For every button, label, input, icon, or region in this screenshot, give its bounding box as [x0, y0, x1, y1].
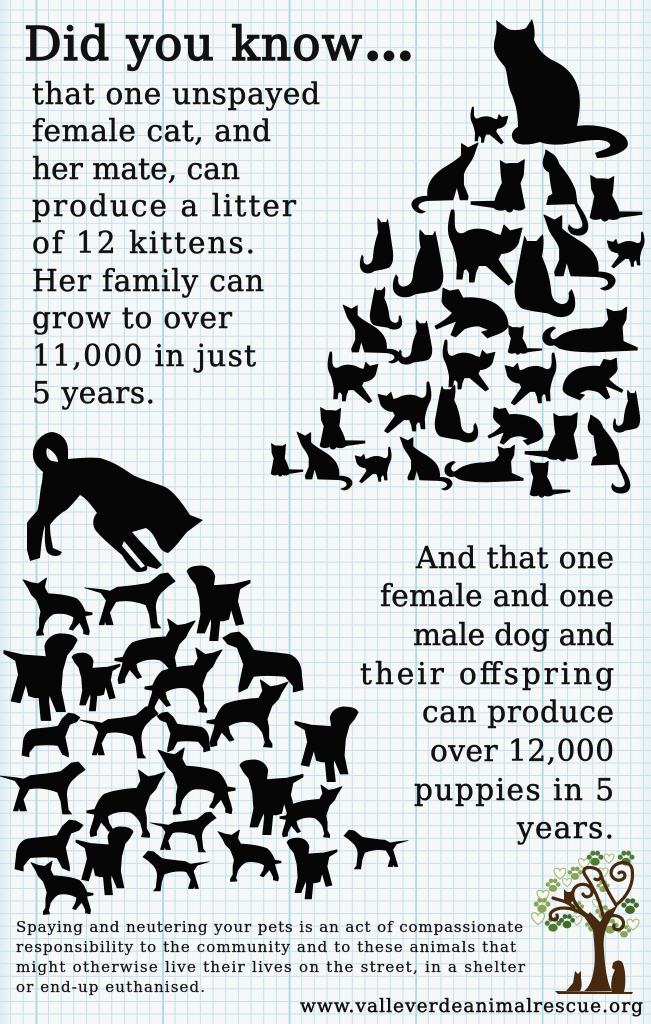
cat walking — [328, 352, 378, 403]
dog pointy ears — [207, 680, 288, 747]
dog pointy ears — [145, 648, 222, 712]
text block: dog fact: And that one — [415, 541, 614, 575]
dog slim — [150, 812, 216, 852]
dog pointy ears — [87, 770, 165, 837]
kitten — [320, 407, 365, 449]
small cat — [566, 971, 582, 991]
cat long tail — [543, 150, 588, 235]
owl on branch — [564, 889, 573, 903]
cat crouching — [488, 407, 543, 445]
dog lab — [295, 707, 358, 781]
dog pointy ears — [23, 578, 92, 635]
title: ... — [364, 13, 414, 72]
text block: dog fact: over 12,000 — [430, 734, 614, 768]
cat from behind — [393, 230, 443, 297]
kitten — [508, 325, 542, 354]
dog pyramid — [0, 432, 408, 914]
kitten — [471, 160, 525, 212]
text block: spay and neuter message: responsibility to the community and to these animals that — [16, 938, 516, 956]
small dog — [611, 960, 625, 992]
text block: dog fact: years. — [516, 811, 614, 845]
cat from behind — [613, 390, 640, 432]
text block: cat fact — [32, 77, 320, 410]
dog pointy ears — [115, 619, 195, 684]
dog lab — [287, 838, 337, 899]
green paw leaves and hearts — [532, 851, 639, 938]
ground — [555, 991, 633, 994]
text block: cat fact: Her family can — [32, 264, 264, 298]
cat lying — [445, 445, 523, 482]
text block: spay and neuter message: Spaying and neutering your pets is an act of compassionate — [16, 918, 523, 936]
text block: cat fact: of 12 kittens. — [32, 226, 255, 260]
large mother cat — [494, 19, 628, 158]
large dog — [27, 432, 203, 572]
title: Did you know — [24, 17, 362, 72]
cat walking — [378, 382, 431, 433]
cat pyramid — [271, 19, 644, 497]
logo: tree with cat and dog — [532, 851, 639, 994]
cat from behind — [435, 385, 478, 442]
dog stocky — [22, 713, 80, 757]
kitten — [525, 412, 578, 461]
cat long tail — [588, 415, 630, 493]
dog pointy ears — [280, 785, 342, 837]
text block: cat fact: produce a litter — [32, 189, 297, 223]
cat lying — [543, 307, 637, 352]
text block: cat fact: that one unspayed — [32, 77, 320, 111]
text block: dog fact: male dog and — [413, 618, 614, 652]
kitten — [590, 175, 642, 221]
text block: dog fact — [360, 541, 614, 845]
dog lab — [187, 566, 250, 640]
dog pointy ears — [218, 830, 281, 881]
cat crouching — [435, 288, 508, 338]
text block: cat fact: female cat, and — [32, 114, 271, 148]
text block: spay and neuter message: might otherwise live their lives on the street, in a shelter — [16, 958, 526, 976]
dog lab small — [72, 653, 120, 711]
cat from behind — [370, 287, 402, 329]
cat crouching — [563, 358, 623, 400]
kitten walking — [355, 447, 391, 483]
cat walking — [449, 210, 522, 285]
dog slim — [344, 830, 408, 869]
cat sitting — [343, 305, 400, 363]
dog slim — [80, 706, 158, 758]
kitten walking — [607, 232, 644, 268]
text block: dog fact: female and one — [380, 579, 614, 613]
cat sitting — [544, 215, 615, 290]
cat walking — [505, 353, 556, 405]
cat sitting — [412, 143, 478, 213]
cat from behind — [398, 320, 432, 364]
dog stocky — [157, 712, 210, 752]
text block: spay and neuter message: or end-up euthanised. — [16, 978, 205, 996]
text block: cat fact: 11,000 in just — [32, 339, 256, 373]
dog stocky — [15, 820, 83, 871]
website url: www.valleverdeanimalrescue.org — [300, 996, 643, 1017]
text block: dog fact: puppies in 5 — [414, 773, 614, 807]
tree trunk and swirling branches — [550, 863, 633, 994]
dog pointy ears — [31, 861, 93, 914]
dog lab — [240, 760, 303, 834]
text block: cat fact: her mate, can — [32, 152, 240, 186]
text block: dog fact: can produce — [422, 695, 614, 729]
text block: dog fact: their offspring — [360, 657, 614, 691]
kitten — [271, 443, 303, 476]
dog slim — [143, 851, 209, 891]
dog slim — [0, 762, 85, 814]
kitten — [530, 460, 570, 497]
dog lab — [76, 827, 133, 895]
cat walking — [443, 340, 495, 391]
cat sitting — [400, 437, 452, 490]
cat from behind — [360, 218, 393, 273]
cat from behind — [515, 235, 575, 317]
dog pointy ears — [158, 748, 235, 814]
kitten walking — [471, 107, 508, 144]
dog lab — [4, 634, 77, 720]
text block: cat fact: 5 years. — [32, 376, 155, 410]
cat sitting — [297, 432, 352, 490]
dog slim — [85, 573, 175, 628]
text block: cat fact: grow to over — [32, 301, 233, 335]
text block: spay and neuter message — [16, 918, 526, 996]
dog stocky — [223, 632, 303, 692]
